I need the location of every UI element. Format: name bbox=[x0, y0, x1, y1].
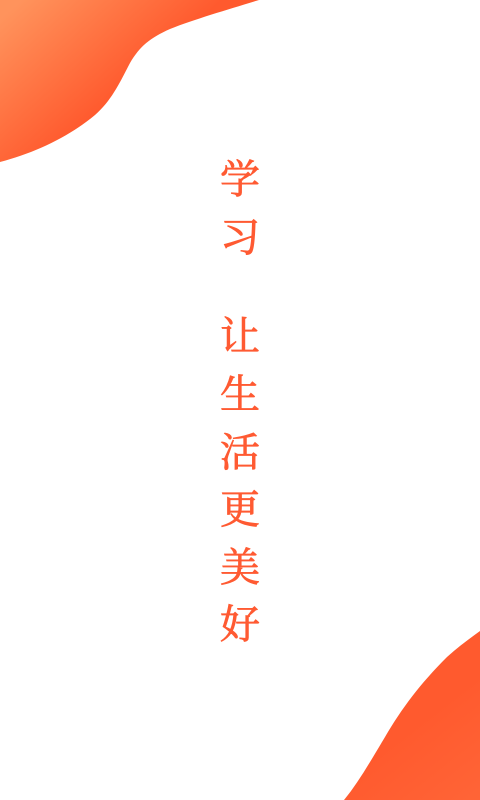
character: 美: 美 bbox=[220, 545, 260, 590]
top-left orange wave bbox=[0, 0, 259, 162]
character: 活: 活 bbox=[220, 430, 260, 475]
vertical slogan bbox=[220, 157, 260, 647]
character: 生: 生 bbox=[220, 372, 260, 417]
character: 学: 学 bbox=[220, 157, 260, 202]
bottom-right orange wave bbox=[344, 631, 480, 800]
character: 好: 好 bbox=[220, 602, 260, 647]
character: 更: 更 bbox=[220, 487, 260, 532]
character: 让: 让 bbox=[220, 314, 260, 359]
character: 习: 习 bbox=[220, 215, 260, 260]
